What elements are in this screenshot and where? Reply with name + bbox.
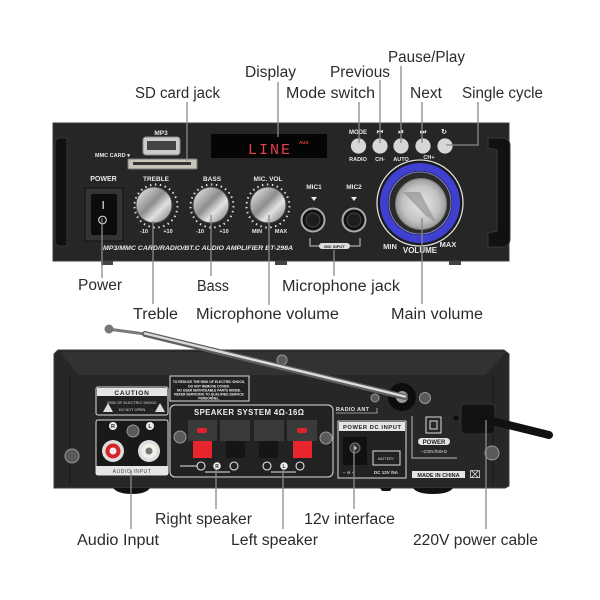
mic volume knob [246,176,290,235]
top labels: Display [245,64,296,81]
treble knob: TREBLE [143,176,170,183]
top labels: Next [410,85,443,102]
warning text: NO USER SERVICEABLE PARTS INSIDE. [177,388,241,392]
top labels: SD card jack [135,85,220,102]
middle labels: Microphone jack [282,278,400,295]
top labels: Mode switch [286,85,375,102]
power switch: POWER [90,176,117,183]
bottom labels [77,511,538,549]
audio input rca: R [111,424,115,430]
middle labels [78,277,483,323]
control buttons: AUTO [393,157,409,163]
ac power label: ~230V/50Hz [421,449,448,455]
bottom labels: Right speaker [155,511,252,528]
bass knob: -10 [196,229,204,235]
middle labels: Treble [133,306,178,323]
middle labels: Bass [197,278,229,295]
speaker terminals: SPEAKER SYSTEM 4Ω-16Ω [194,408,304,417]
leader lines [102,66,486,529]
top labels: Pause/Play [388,49,465,66]
control buttons: MODE [349,130,367,136]
right handle [488,138,510,247]
power dc input: – ⊖ + [343,470,355,475]
radio antenna label: RADIO ANT [336,407,370,413]
middle labels: Main volume [391,306,483,323]
bass knob: +10 [219,229,229,235]
model text: MP3/MMC CARD/RADIO/BT.C AUDIO AMPLIFIER BT-298A [103,245,293,252]
warning text: TO REDUCE THE RISK OF ELECTRIC SHOCK, [173,380,245,384]
mic volume knob: MIC. VOL [254,176,282,183]
bottom labels: Left speaker [231,532,318,549]
speaker terminals [170,405,333,477]
ac power label: POWER [423,440,446,446]
screws [65,355,499,463]
main volume knob: MIN [383,242,397,251]
rubber feet [113,488,453,494]
caution label: DO NOT OPEN [119,408,146,412]
microphone jacks: MIC1 [306,184,322,191]
control buttons: CH+ [423,155,435,161]
microphone jacks: MIC INPUT [324,244,345,249]
power dc input: BATTERY [378,457,395,461]
top labels: Single cycle [462,85,543,102]
control buttons: CH- [375,157,385,163]
caution label: CAUTION [114,390,150,397]
main volume knob: VOLUME [403,246,438,255]
power switch [85,176,123,241]
microphone jacks [302,184,366,249]
bottom labels: 12v interface [304,511,395,528]
led display: AUX [299,140,309,145]
power dc input: POWER DC INPUT [343,425,401,431]
control buttons: ⏮ [377,129,384,136]
made in china label: MADE IN CHINA [417,473,460,479]
top labels [135,49,543,102]
main volume knob [377,160,463,255]
treble knob: +10 [163,229,173,235]
usb port: MP3 [154,130,168,137]
warning text: DO NOT REMOVE COVER. [188,384,230,388]
made in china label [412,470,481,481]
treble knob: -10 [140,229,148,235]
middle labels: Power [78,277,122,294]
bottom labels: Audio Input [77,532,160,549]
caution label [96,387,168,415]
audio input rca [96,420,168,475]
speaker terminals: L [282,464,286,470]
rear amplifier panel [54,350,509,494]
control buttons [349,129,453,163]
power dc input: DC 12V /5A [374,470,399,475]
microphone jacks: MIC2 [346,184,362,191]
audio input rca: AUDIO INPUT [113,469,151,475]
speaker terminals: R [215,464,219,470]
bass knob: BASS [203,176,222,183]
made in china label: ⌧ [469,470,481,481]
caution label: RISK OF ELECTRIC SHOCK [107,401,157,405]
front amplifier panel [53,123,510,265]
control buttons: RADIO [349,157,368,163]
treble knob [134,176,178,235]
mic volume knob: MAX [275,229,287,235]
mmc card slot [95,153,197,169]
power plug and cable [461,404,549,435]
led display [211,134,327,159]
feet [101,261,113,265]
warning text: REFER SERVICING TO QUALIFIED SERVICE [174,392,245,396]
warning text [170,376,249,401]
usb port [143,130,180,155]
mic volume knob: MIN [252,229,262,235]
warning text: PERSONNEL. [198,396,220,400]
top labels: Previous [330,64,390,81]
led display: LINE [248,142,293,159]
control buttons: ⏯ [398,129,404,136]
mmc card slot: MMC CARD ▾ [95,153,131,159]
control buttons: ↻ [441,129,447,136]
bass knob [190,176,234,235]
power dc input [338,421,406,478]
bottom labels: 220V power cable [413,532,538,549]
middle labels: Microphone volume [196,306,339,323]
antenna [104,324,416,411]
audio input rca: L [148,424,152,430]
main volume knob: MAX [440,240,456,249]
left handle [55,138,67,246]
ac power label [412,416,458,458]
control buttons: ⏭ [420,129,427,136]
